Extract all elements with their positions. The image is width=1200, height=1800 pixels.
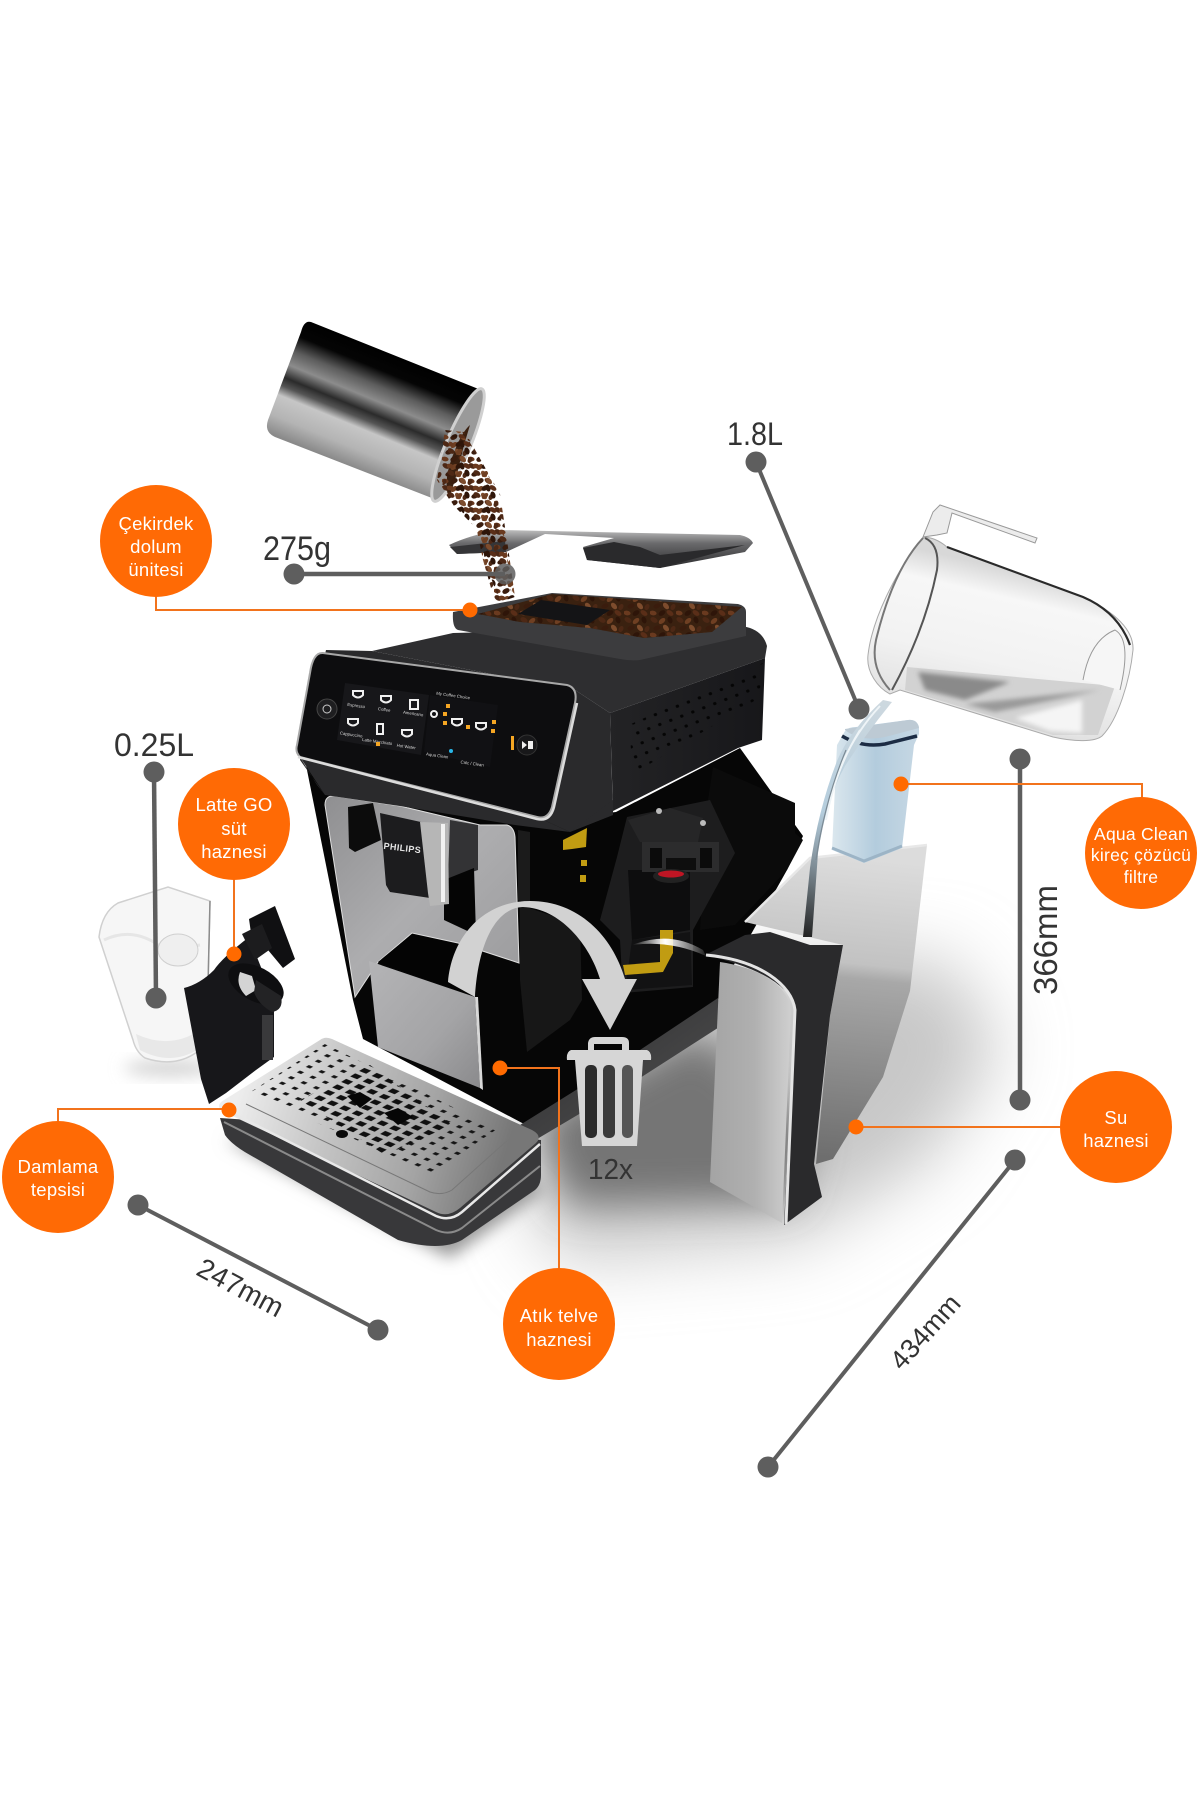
water stream [803,700,892,937]
callout: Atık telve haznesi [492,1060,615,1380]
drink labels: My Coffee Choice [436,691,471,700]
callout: Çekirdek dolum ünitesi: ünitesi [128,559,184,580]
silver front panel [710,962,791,1223]
start button [517,735,537,755]
drink labels [340,691,485,768]
floor shadows [124,960,1000,1260]
drink labels: Hot Water [396,743,417,750]
transparent tank [745,845,927,1164]
callout: Aqua Clean kireç çözücü filtre: Aqua Clean [1094,824,1188,844]
callout: Su haznesi: Su [1104,1107,1128,1128]
dimension: 275g: 275g [263,530,331,568]
Latte GO milk frother [184,906,295,1104]
callout: Aqua Clean kireç çözücü filtre [894,776,1197,909]
callout: Latte GO süt haznesi: süt [221,818,247,839]
callout: Damlama tepsisi: Damlama [18,1156,99,1177]
drink labels: Espresso [347,702,366,709]
callout: Damlama tepsisi [2,1102,236,1233]
coffee spout [348,803,449,906]
coffee machine [219,530,803,1246]
callout: Damlama tepsisi: tepsisi [31,1179,85,1200]
dimension: 275g [263,530,516,584]
callout: Aqua Clean kireç çözücü filtre: filtre [1124,867,1158,887]
bean hopper [453,593,746,660]
callout: Latte GO süt haznesi: haznesi [201,841,267,862]
dispenser cavity [444,820,478,935]
reflection swoosh [632,939,706,956]
power button [317,699,337,719]
drip tray [219,1038,541,1246]
yellow latch parts [563,828,587,882]
callout: Latte GO süt haznesi: Latte GO [195,794,273,815]
indicator lights [376,704,514,753]
machine interior and base [305,748,803,1142]
dimension: 247mm [128,1194,388,1340]
callout: Aqua Clean kireç çözücü filtre: kireç çözücü [1091,845,1191,865]
callout: Çekirdek dolum ünitesi [100,485,478,618]
dimension: 0.25L [114,727,194,1008]
drink labels: Americano [403,710,424,718]
drink labels: Coffee [378,706,391,713]
dimension: 366mm: 366mm [1027,885,1064,995]
callout: Çekirdek dolum ünitesi: Çekirdek [118,513,194,534]
arrow: into bin [448,901,637,1030]
drink labels: Latte Macchiato [362,737,393,746]
callout: Atık telve haznesi: Atık telve [520,1305,598,1326]
water jug [868,505,1133,741]
drink labels: Cappuccino [340,730,363,739]
callout: Latte GO süt haznesi [178,768,290,962]
label: 12x: 12x [588,1154,633,1186]
falling coffee beans [437,430,515,602]
dimension: 434mm: 434mm [884,1288,967,1375]
water tank [632,845,927,1225]
dimension: 247mm: 247mm [192,1252,289,1323]
top surface [372,626,767,713]
dimension: 1.8L [727,416,870,720]
drink icons [348,691,486,736]
waste coffee drawer [369,934,483,1090]
dimension: 0.25L: 0.25L [114,727,194,763]
dimension: 366mm [1010,748,1064,1110]
coffee canister [267,322,493,506]
drink labels: Calc / Clean [460,759,485,768]
callout: Su haznesi [848,1071,1172,1183]
control panel [296,653,577,820]
dimension: 1.8L: 1.8L [727,416,783,452]
dark tank body [705,932,843,1225]
hopper lid [449,530,753,568]
Philips logo: PHILIPS [383,841,422,855]
brew group [600,767,803,993]
milk container glass [99,887,210,1062]
dimension: 434mm [758,1150,1026,1478]
icon: trash bin [567,1037,651,1146]
drink labels: Aqua Clean [426,751,449,760]
Aqua Clean filter [832,720,919,863]
callout: Atık telve haznesi: haznesi [526,1329,592,1350]
silver front fascia [325,796,519,997]
right side panel [610,658,765,811]
callout: Çekirdek dolum ünitesi: dolum [130,536,182,557]
callout: Su haznesi: haznesi [1083,1130,1149,1151]
front corner [300,650,613,832]
